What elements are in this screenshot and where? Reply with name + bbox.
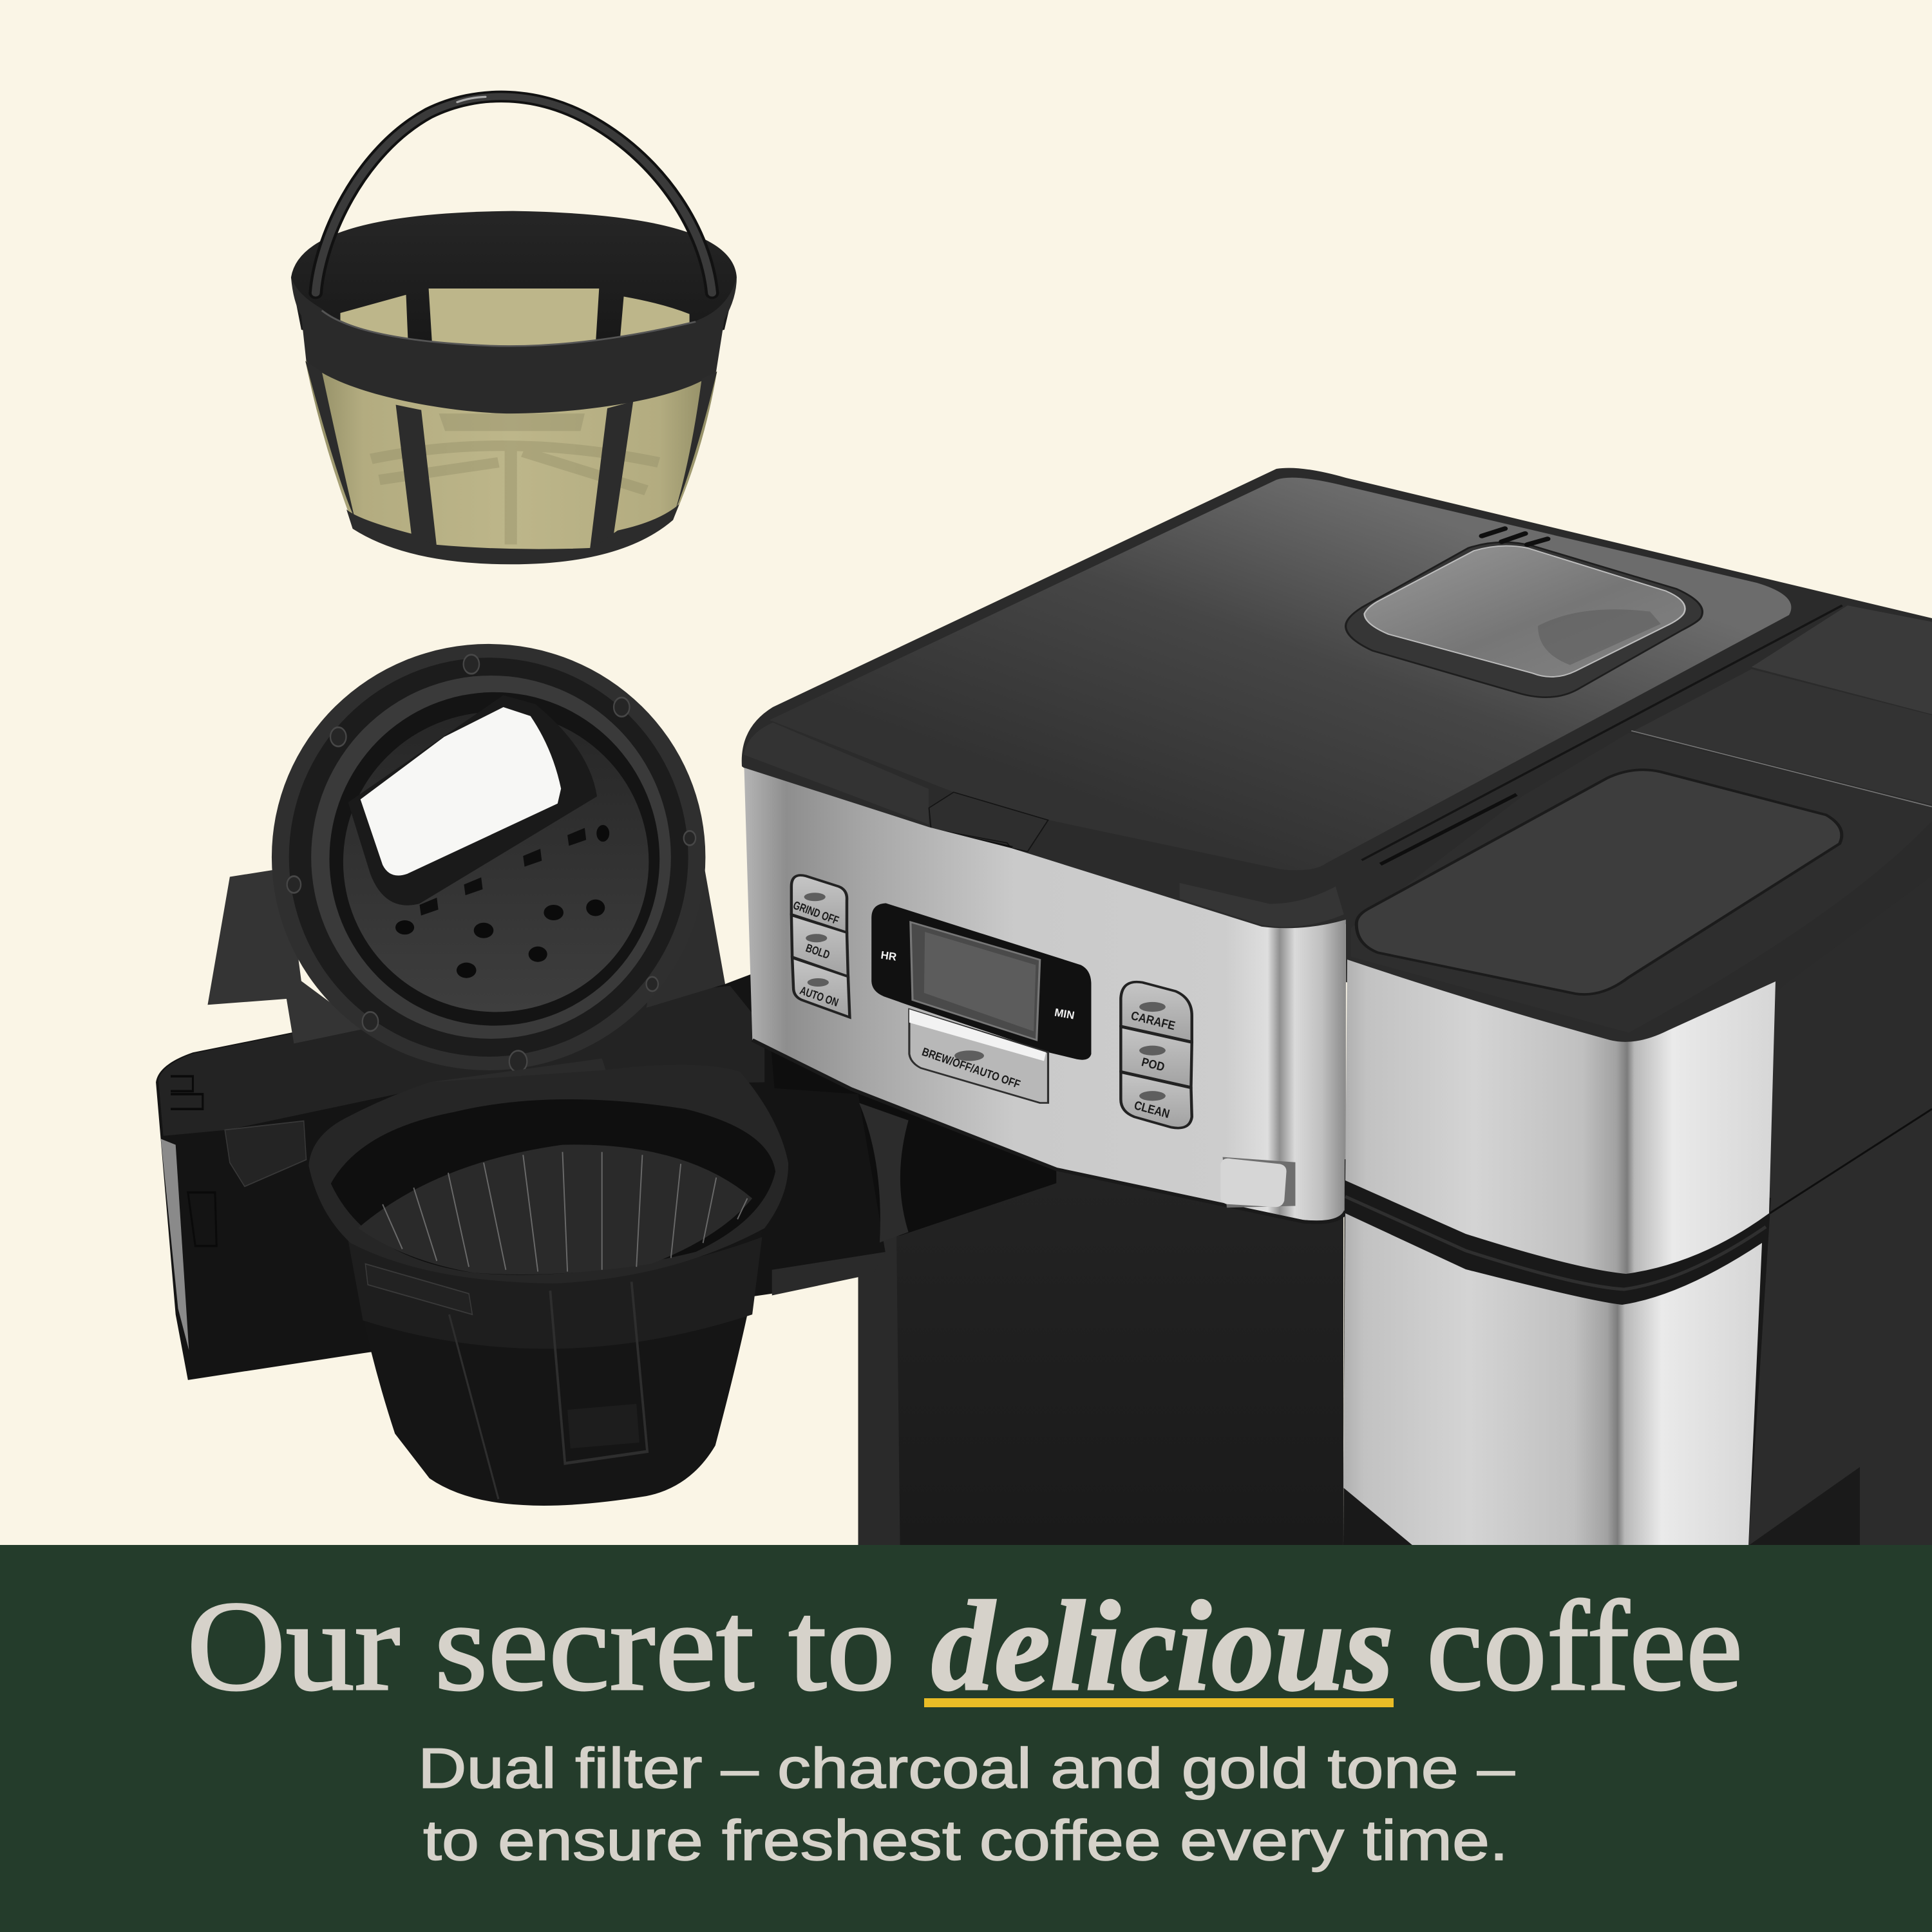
- stainless control panel: [744, 768, 1346, 1222]
- back wall of basket: [291, 211, 737, 354]
- main lid top: [770, 478, 1791, 870]
- basket opening: [331, 1099, 775, 1275]
- band highlight: [322, 310, 696, 346]
- lower notch: [1748, 1467, 1860, 1546]
- button: auto on: [792, 958, 849, 1018]
- water reservoir panel: [1634, 669, 1932, 805]
- gold tone mesh filter basket: [291, 97, 737, 564]
- button: clean: [1121, 1072, 1192, 1128]
- stainless tower panels: [1343, 960, 1776, 1546]
- spout under panel: [859, 1103, 909, 1242]
- slot window: [567, 1404, 639, 1448]
- control labels: [791, 898, 1177, 1121]
- label: min: MIN: [1054, 1006, 1075, 1022]
- subheading: [418, 1736, 1515, 1872]
- hinge bridge: [430, 1059, 612, 1094]
- label: carafe: CARAFE: [1130, 1009, 1177, 1033]
- drain holes: [395, 825, 609, 978]
- housing left corner highlight: [744, 723, 929, 824]
- lower stainless panel: [1343, 1213, 1762, 1546]
- basket rim: [308, 1065, 788, 1283]
- coffee maker upper housing: [742, 468, 1932, 1242]
- button: carafe: [1121, 982, 1192, 1042]
- brew window collar: [1346, 542, 1702, 697]
- front band of basket: [291, 278, 737, 413]
- hinge clip: [225, 1121, 307, 1186]
- right button group: [1121, 982, 1192, 1128]
- window frame: [348, 695, 597, 905]
- coffee maker lower body: [728, 863, 1932, 1546]
- left wing: [207, 868, 365, 1043]
- steam vents: [1482, 529, 1548, 545]
- front slot: [550, 1282, 647, 1463]
- power slider: [1220, 1159, 1287, 1207]
- right side housing: [1732, 863, 1932, 1546]
- tray body: [156, 969, 886, 1380]
- body upper band: [348, 1237, 762, 1349]
- floor ribs: [383, 1152, 747, 1272]
- lid outer disc: [272, 644, 705, 1070]
- right rear panels and pod area: [1346, 529, 1932, 1033]
- label: brew off auto off: BREW/OFF/AUTO OFF: [920, 1045, 1022, 1091]
- stainless face: [744, 768, 1346, 1220]
- handle highlight: [457, 97, 486, 102]
- drain tabs: [420, 828, 586, 916]
- left button leds: [804, 893, 829, 987]
- display glass: [924, 932, 1036, 1031]
- label: pod: POD: [1140, 1056, 1166, 1074]
- dome inner shadow: [1538, 609, 1661, 665]
- tray left slots: [171, 1076, 216, 1246]
- panel bottom lip: [752, 1040, 1346, 1222]
- brew led: [954, 1050, 984, 1061]
- left column and brew cavity: [858, 1065, 1343, 1545]
- lid clasp: [929, 792, 1048, 851]
- inner ring: [329, 692, 659, 1026]
- banner background: [0, 1545, 1932, 1932]
- side separator line: [1768, 1109, 1932, 1215]
- white charcoal filter window: [361, 707, 561, 876]
- perforated plate: [343, 712, 649, 1012]
- black housing: [742, 468, 1932, 1063]
- heading: [187, 1575, 1743, 1718]
- label: grind off: GRIND OFF: [791, 898, 840, 927]
- button: pod: [1121, 1027, 1192, 1087]
- tray top surface: [158, 986, 764, 1136]
- basket floor: [358, 1144, 752, 1274]
- label: auto on: AUTO ON: [798, 984, 840, 1009]
- charcoal filter swing lid: [207, 644, 725, 1072]
- brew button: [909, 1009, 1048, 1103]
- heading: Our secret to: [187, 1575, 895, 1718]
- pod surround lip light line: [1631, 731, 1932, 807]
- channel between lid and pod: [1361, 605, 1842, 860]
- heading: coffee: [1426, 1575, 1743, 1718]
- basket body: [346, 1231, 762, 1506]
- rim screw bosses: [287, 655, 696, 1072]
- housing right corner highlight: [1180, 883, 1344, 927]
- clock display: [911, 922, 1040, 1040]
- side handle: [365, 1264, 472, 1314]
- wire handle: [316, 97, 712, 293]
- seam lighter gasket: [1345, 1197, 1766, 1289]
- clock bezel: [871, 903, 1091, 1060]
- right wing: [647, 790, 725, 1008]
- brew window dome: [1365, 546, 1685, 677]
- subheading: to ensure freshest coffee every time.: [423, 1808, 1508, 1872]
- left button group: [791, 875, 849, 1018]
- label: bold: BOLD: [804, 942, 831, 961]
- body seam: [449, 1314, 498, 1499]
- label: hr: HR: [880, 949, 897, 963]
- button: bold: [791, 915, 848, 976]
- metal sliver: [161, 1139, 189, 1350]
- right button leds: [1139, 1002, 1166, 1101]
- yellow underline: [924, 1698, 1394, 1707]
- pod surround: [1351, 733, 1932, 1033]
- inner base shadow in mesh: [439, 413, 585, 431]
- button: grind off: [791, 875, 847, 933]
- brew button highlight: [909, 1009, 1046, 1061]
- mesh lower body: [305, 361, 717, 564]
- tray right shelf: [772, 1252, 886, 1296]
- rear panel: [1752, 605, 1932, 714]
- slide-out filter tray: [156, 969, 886, 1380]
- bottom banner: [0, 1545, 1932, 1932]
- middle ring: [311, 676, 671, 1039]
- removable brew basket: [308, 1059, 788, 1506]
- pod top plate: [1356, 770, 1842, 994]
- subheading: Dual filter – charcoal and gold tone –: [418, 1736, 1515, 1800]
- see-through shadows in mesh: [371, 446, 659, 544]
- upper stainless panel: [1345, 960, 1776, 1274]
- dark cavity under panel: [728, 1023, 1056, 1253]
- tower backing: [1343, 1159, 1771, 1546]
- frame ribs and bottom ring: [305, 361, 717, 564]
- label: clean: CLEAN: [1133, 1099, 1171, 1121]
- outer gasket ring: [289, 658, 688, 1057]
- heading: delicious: [931, 1575, 1394, 1718]
- upper mesh windows: [340, 289, 690, 354]
- power slider shadow: [1223, 1157, 1295, 1208]
